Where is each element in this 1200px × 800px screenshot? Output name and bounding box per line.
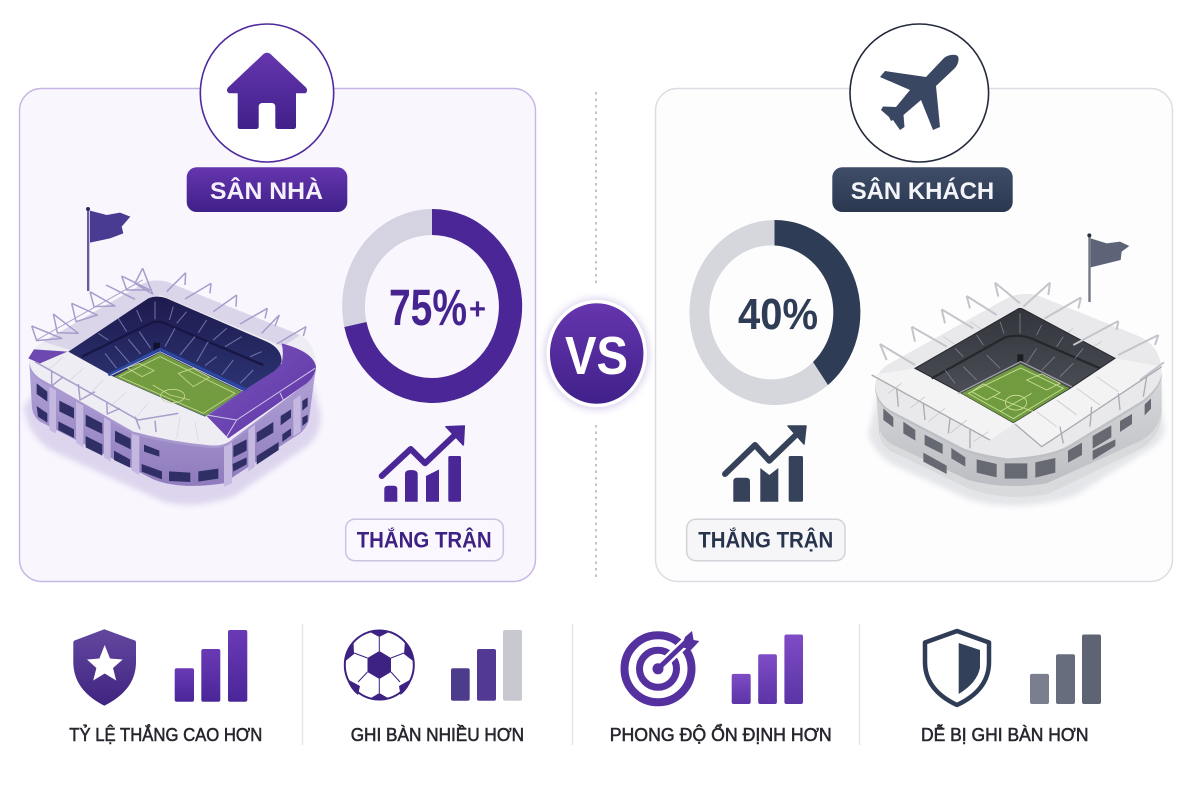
panel: home ground [20, 24, 536, 582]
panel: away ground [656, 24, 1172, 582]
stadium illustration: purple [24, 207, 321, 505]
donut chart: 75%+: 75% [389, 279, 467, 336]
metric: concedes more: DỄ BỊ GHI BÀN HƠN [921, 724, 1088, 745]
pitch [114, 353, 242, 416]
panel background: home [20, 88, 536, 582]
VS badge: VS [565, 326, 628, 386]
icon: shield with star [73, 629, 136, 706]
heading pill: SÂN KHÁCH: SÂN KHÁCH [851, 177, 994, 205]
flag: slate [1087, 233, 1129, 302]
pitch [962, 364, 1069, 423]
metric: concedes more [921, 631, 1101, 745]
bar chart: consistent form [732, 634, 803, 704]
icon: football [345, 630, 414, 700]
center dotted divider [595, 92, 597, 581]
bar chart: goals scored [451, 630, 522, 701]
donut chart: 40% [689, 220, 860, 405]
metric: win rate: TỶ LỆ THẮNG CAO HƠN [69, 724, 262, 745]
seating bowl [68, 297, 282, 417]
icon: target with dart [624, 631, 699, 702]
metric: consistent form: PHONG ĐỘ ỔN ĐỊNH HƠN [610, 724, 832, 745]
metric: win rate [69, 629, 262, 745]
donut chart: 40%: 40% [738, 290, 818, 339]
icon: rising chart slate [725, 426, 806, 502]
bar chart: concedes more [1030, 634, 1101, 704]
metric: goals scored: GHI BÀN NHIỀU HƠN [351, 724, 524, 745]
stadium illustration: grey [868, 233, 1164, 506]
icon: half shield [925, 631, 989, 705]
icon: house badge [200, 24, 334, 162]
seating bowl [915, 308, 1115, 423]
roof trusses [32, 268, 315, 437]
label pill: THẮNG TRẬN home: THẮNG TRẬN [357, 528, 492, 553]
metric: consistent form [610, 631, 832, 745]
donut chart: 75%+ [342, 209, 522, 403]
label pill: THẮNG TRẬN home [346, 519, 503, 561]
bar chart: win rate [175, 630, 247, 702]
heading pill: SÂN KHÁCH [832, 167, 1013, 212]
heading pill: SÂN NHÀ [187, 167, 347, 212]
donut chart: 75%+: + [469, 293, 486, 326]
flag: purple [86, 207, 130, 291]
roof trusses [872, 283, 1164, 448]
panel background: away [656, 88, 1172, 582]
metric: goals scored [345, 630, 524, 745]
icon: plane badge [850, 24, 989, 162]
heading pill: SÂN NHÀ: SÂN NHÀ [210, 177, 323, 205]
metrics row [69, 624, 1101, 745]
label pill: THẮNG TRẬN away [687, 519, 845, 561]
label pill: THẮNG TRẬN away: THẮNG TRẬN [698, 528, 833, 553]
VS badge [545, 298, 649, 410]
icon: rising chart purple [382, 426, 464, 502]
